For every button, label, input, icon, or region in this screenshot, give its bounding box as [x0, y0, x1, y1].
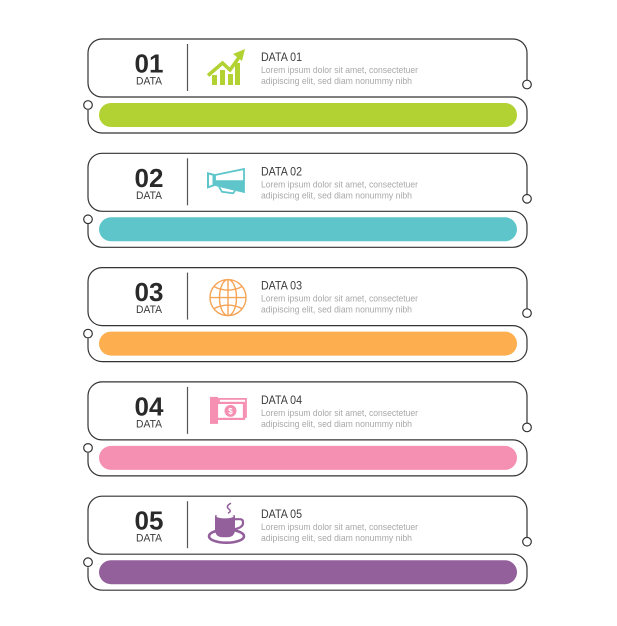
row 05 purple bar: [99, 560, 517, 584]
row 02 text: Lorem ipsum dolor sit amet, consectetuer: [261, 179, 418, 189]
row 03 text: Lorem ipsum dolor sit amet, consectetuer: [261, 294, 418, 304]
row 03 number: 03: [135, 277, 163, 307]
row 02 text: adipiscing elit, sed diam nonummy nibh: [261, 190, 412, 200]
row 05 text: [261, 509, 418, 543]
row 02 frame: [84, 153, 531, 247]
row 02 teal bar: [99, 217, 517, 241]
row 04 pink bar: [99, 446, 517, 470]
panel: row 05: [84, 496, 531, 590]
row 01 data label: DATA: [136, 76, 163, 88]
panel: row 03: [84, 268, 531, 362]
row 05 number: 05: [135, 506, 163, 536]
row 01 text: adipiscing elit, sed diam nonummy nibh: [261, 76, 412, 86]
row 03 orange bar: [99, 332, 517, 356]
row 05 frame: [84, 496, 531, 590]
icon: megaphone: [208, 169, 244, 193]
row 03 text: adipiscing elit, sed diam nonummy nibh: [261, 305, 412, 315]
row 04 text: DATA 04: [261, 395, 303, 407]
icon: globe: [210, 280, 246, 316]
row 02 data label: DATA: [136, 190, 163, 202]
row 01 number: 01: [135, 48, 163, 78]
row 04 number: 04: [135, 391, 164, 421]
icon: banknotes: [210, 397, 246, 424]
row 03 text: [261, 281, 418, 315]
row 04 frame: [84, 382, 531, 476]
icon: coffee cup: [209, 503, 244, 543]
row 04 data label: DATA: [136, 418, 163, 430]
row 01 green bar: [99, 103, 517, 127]
row 01 text: DATA 01: [261, 52, 302, 64]
row 01 frame: [84, 39, 531, 133]
panel: row 02: [84, 153, 531, 247]
row 01 text: Lorem ipsum dolor sit amet, consectetuer: [261, 65, 418, 75]
row 04 text: adipiscing elit, sed diam nonummy nibh: [261, 419, 412, 429]
row 04 text: [261, 395, 418, 429]
panel: row 01: [84, 39, 531, 133]
row 02 text: [261, 166, 418, 200]
row 01 text: [261, 52, 418, 86]
row 03 frame: [84, 268, 531, 362]
panel: row 04: [84, 382, 531, 476]
row 03 data label: DATA: [136, 304, 163, 316]
row 04 text: Lorem ipsum dolor sit amet, consectetuer: [261, 408, 418, 418]
row 05 text: DATA 05: [261, 509, 302, 521]
row 03 text: DATA 03: [261, 281, 302, 293]
row 05 data label: DATA: [136, 533, 163, 545]
row 05 text: Lorem ipsum dolor sit amet, consectetuer: [261, 522, 418, 532]
row 05 text: adipiscing elit, sed diam nonummy nibh: [261, 533, 412, 543]
icon: rising chart with arrow: [208, 49, 245, 85]
row 02 number: 02: [135, 163, 163, 193]
icon: banknotes: $: [228, 407, 233, 416]
row 02 text: DATA 02: [261, 166, 302, 178]
